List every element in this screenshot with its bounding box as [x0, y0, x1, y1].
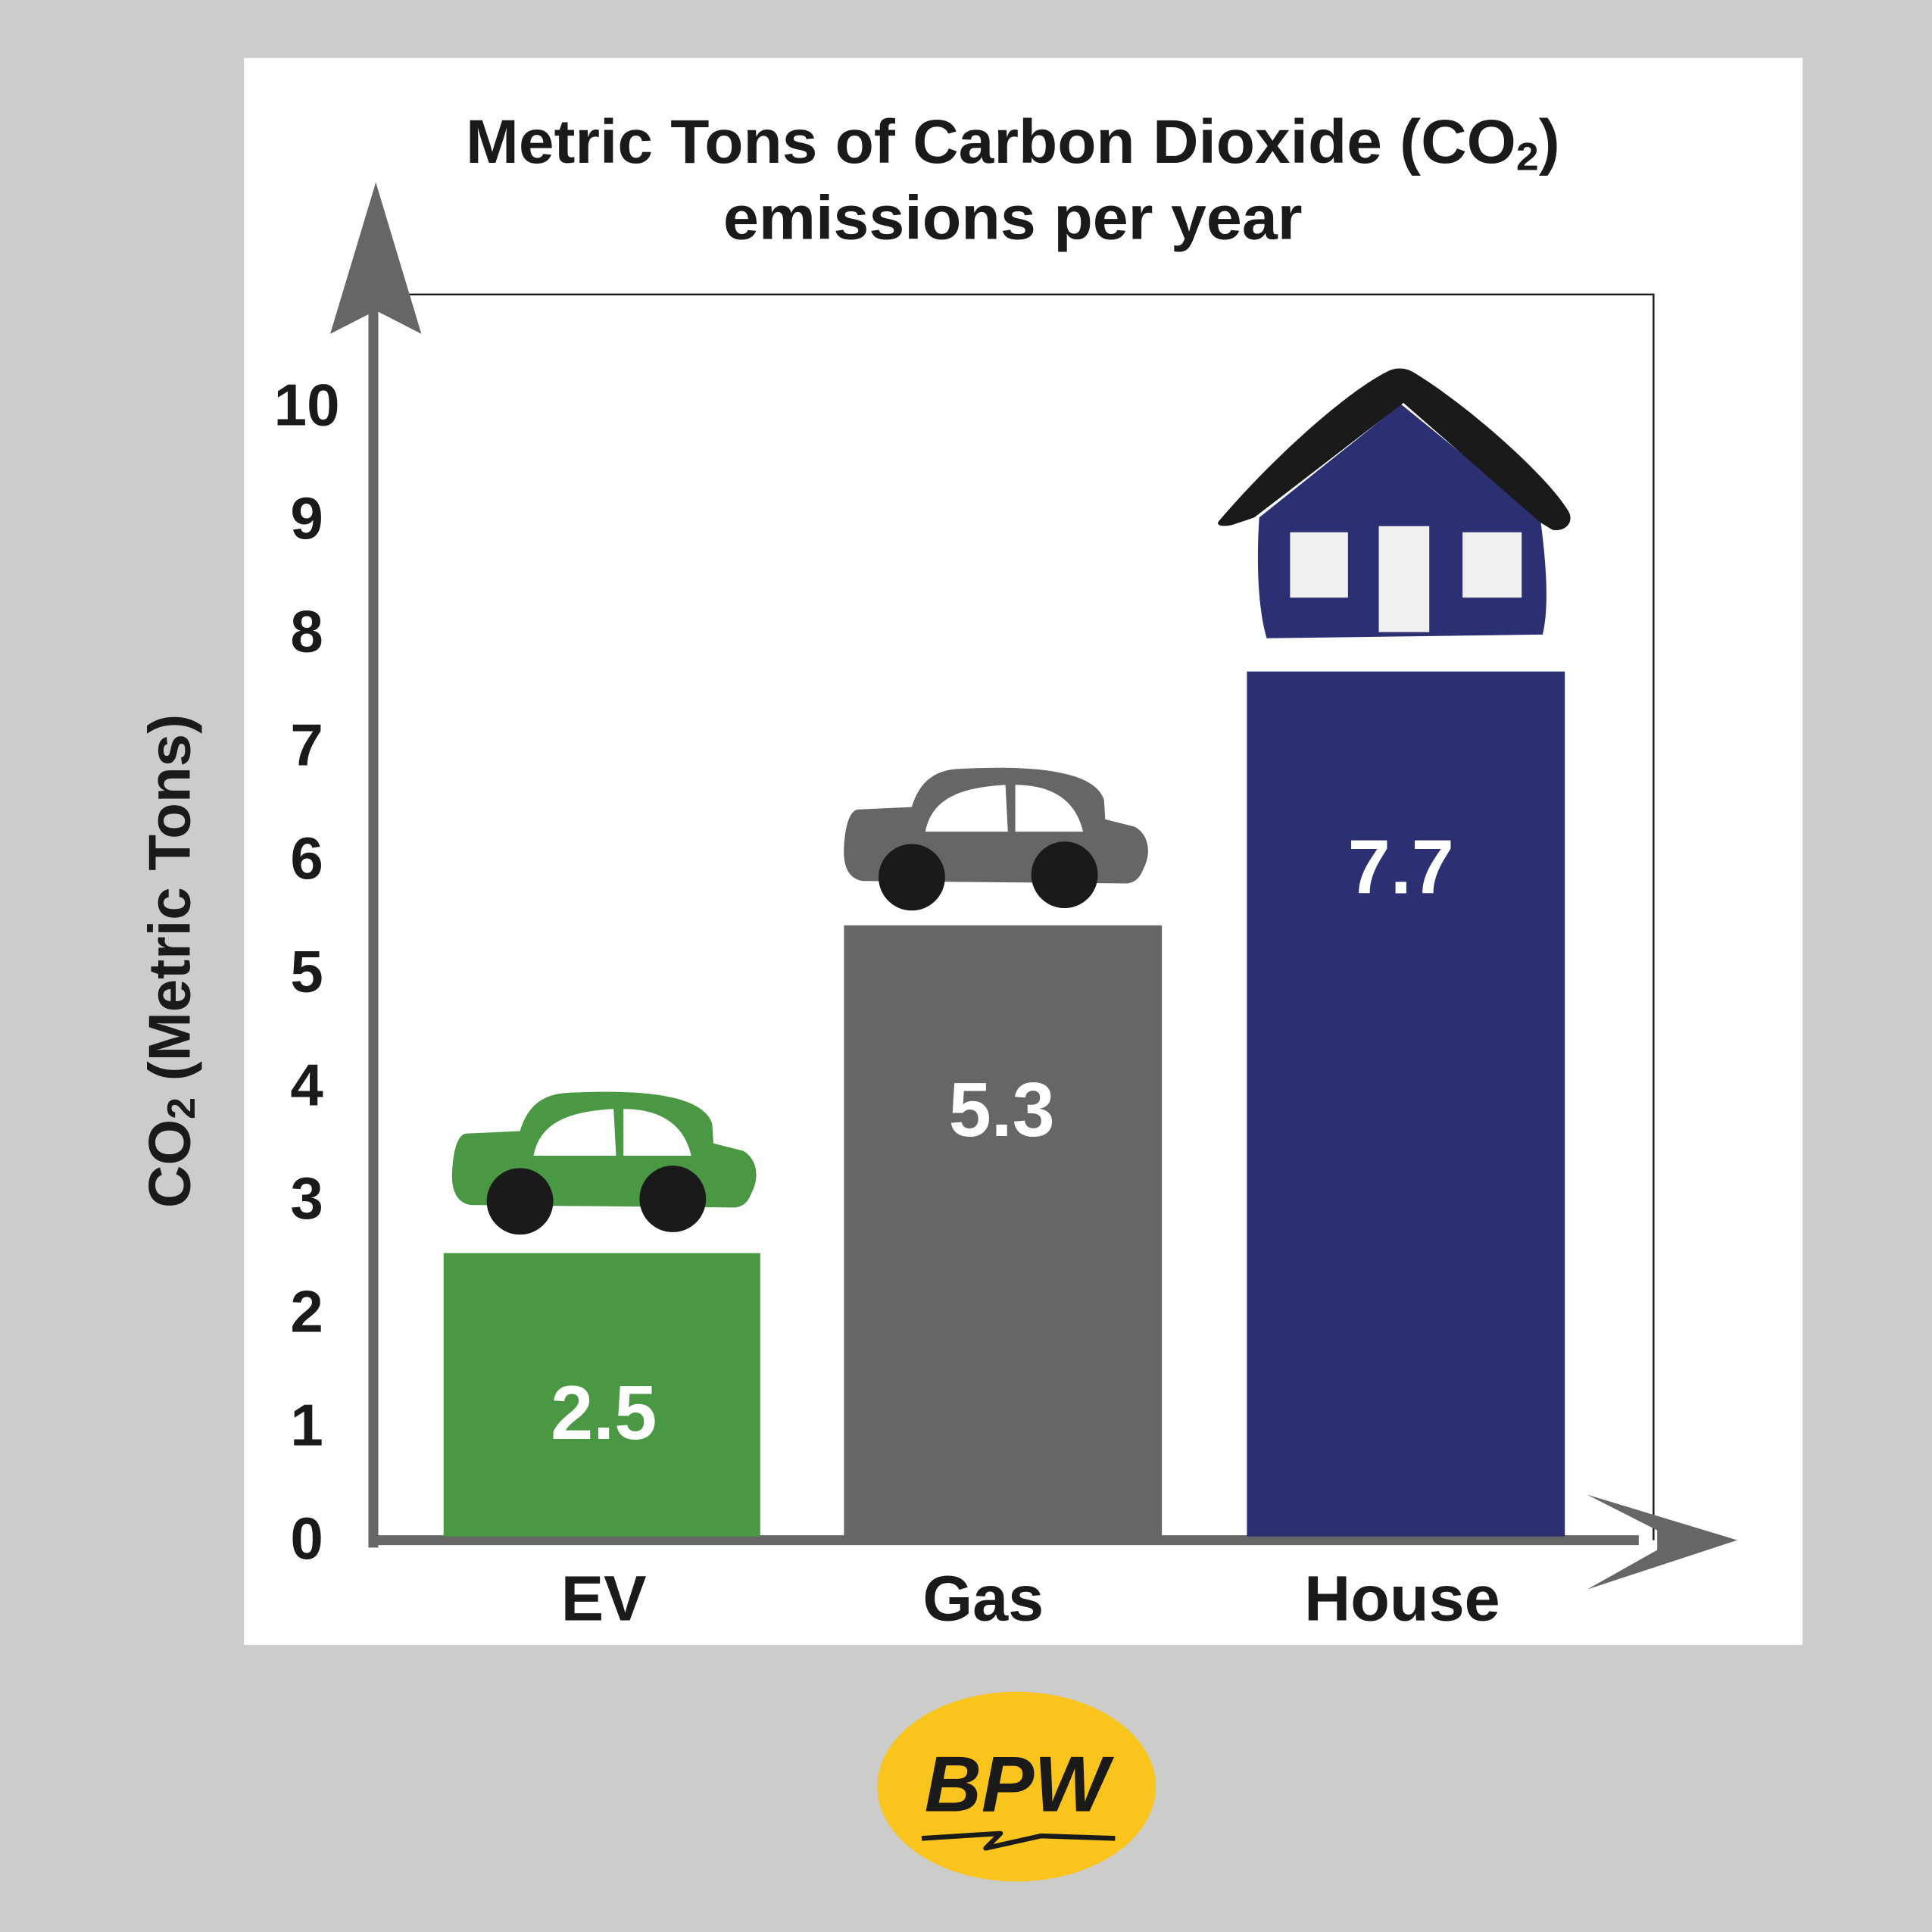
bar: House: 7.7: [1348, 826, 1454, 910]
y axis tick labels: 7: [290, 711, 323, 778]
y axis title: (Metric Tons): [136, 714, 203, 1097]
category labels: EV: [561, 1562, 647, 1634]
y axis title: 2: [160, 1097, 204, 1119]
y axis arrow: [330, 183, 421, 1547]
y axis tick labels: 1: [290, 1391, 323, 1458]
y axis tick labels: 10: [274, 371, 340, 438]
category labels: House: [1304, 1562, 1500, 1634]
bar: EV: [444, 1253, 760, 1537]
logo: BPW: BPW: [925, 1741, 1114, 1829]
category labels: Gas: [922, 1562, 1044, 1634]
bar: Gas: 5.3: [949, 1068, 1055, 1153]
icon: gray car: [844, 768, 1148, 910]
y axis tick labels: 5: [290, 938, 323, 1005]
bar: EV: 2.5: [551, 1371, 657, 1456]
title: 2: [1516, 136, 1539, 179]
plot frame: [407, 295, 1653, 1540]
title: Metric Tons of Carbon Dioxide (CO: [466, 108, 1484, 176]
title: emissions per year: [723, 184, 1303, 253]
icon: green car: [452, 1092, 757, 1234]
y axis tick labels: 4: [290, 1051, 323, 1118]
icon: house: [1218, 368, 1571, 638]
logo: BPW: [877, 1692, 1156, 1881]
y axis tick labels: 0: [290, 1505, 323, 1572]
title: [466, 108, 1560, 253]
y axis tick labels: 2: [290, 1278, 323, 1345]
y axis title: CO: [136, 1119, 203, 1208]
category labels: [561, 1562, 1500, 1634]
bar: Gas: [844, 925, 1162, 1537]
y axis tick labels: 9: [290, 485, 323, 551]
y axis tick labels: 6: [290, 825, 323, 891]
bar: House: [1247, 672, 1565, 1537]
x axis arrow: [370, 1494, 1737, 1590]
y axis tick labels: 3: [290, 1165, 323, 1231]
y axis tick labels: 8: [290, 598, 323, 665]
y axis tick labels: [274, 371, 340, 1572]
title: ): [1539, 108, 1560, 176]
panel: chart card: [244, 58, 1802, 1645]
